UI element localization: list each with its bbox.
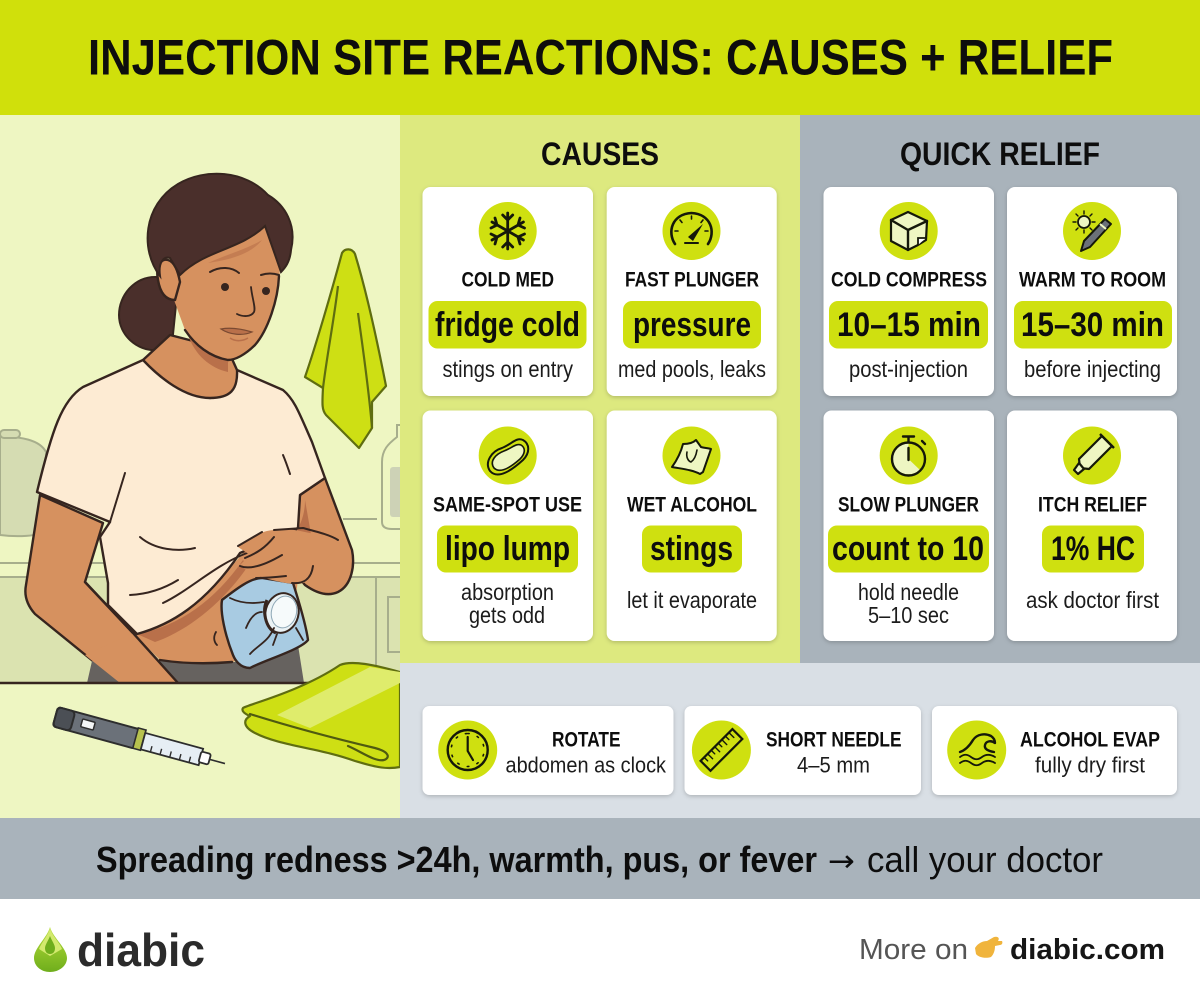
- tip title: SHORT NEEDLE: [766, 729, 902, 752]
- card: fast plunger: [607, 187, 777, 396]
- kitchen background: [0, 425, 408, 683]
- face: [172, 226, 280, 360]
- note: hold needle: [858, 579, 959, 605]
- tip title: ROTATE: [552, 729, 620, 752]
- heading: FAST PLUNGER: [625, 268, 759, 292]
- t-shirt: [37, 360, 325, 634]
- hand: [238, 528, 340, 584]
- ear: [157, 260, 180, 300]
- value pill: lipo lump: [445, 530, 570, 568]
- domain text: diabic.com: [1010, 934, 1165, 966]
- icon: sun and pen: [1063, 202, 1121, 260]
- card: same-spot use: [422, 410, 593, 641]
- folded towel: [242, 663, 400, 768]
- tip text: 4–5 mm: [797, 753, 870, 778]
- panel: illustration of woman using cold compress: [0, 115, 408, 818]
- hair: [148, 174, 293, 276]
- value pill: fridge cold: [435, 306, 580, 344]
- icon: wipe: [662, 426, 720, 484]
- heading: SAME-SPOT USE: [433, 494, 582, 516]
- counter top: [0, 683, 400, 818]
- hanging towel: [305, 249, 386, 448]
- belly: [133, 550, 300, 663]
- note: [858, 579, 959, 628]
- heading: COLD COMPRESS: [831, 268, 987, 292]
- card: warm to room: [1007, 187, 1177, 396]
- value pill: [1042, 526, 1144, 572]
- left arm: [25, 495, 178, 683]
- logo: diabic: [34, 924, 205, 976]
- icon: green droplet: [34, 927, 67, 972]
- card: itch relief: [1007, 410, 1177, 641]
- note: med pools, leaks: [618, 356, 766, 382]
- note: gets odd: [469, 602, 545, 628]
- value pill: [642, 526, 742, 572]
- card: slow plunger: [824, 410, 994, 641]
- tip text: abdomen as clock: [506, 753, 667, 778]
- causes heading: CAUSES: [541, 136, 659, 172]
- icon: ice cube: [880, 202, 938, 260]
- icon: lipo lump: [479, 426, 537, 484]
- heading: SLOW PLUNGER: [838, 494, 979, 516]
- tip card: short needle: [684, 706, 921, 795]
- more on text: More on: [859, 934, 968, 966]
- note: absorption: [461, 579, 554, 605]
- heading: WARM TO ROOM: [1019, 268, 1166, 292]
- note: ask doctor first: [1026, 587, 1160, 613]
- warning bar: [0, 818, 1200, 899]
- note: 5–10 sec: [868, 602, 949, 628]
- left arm front edge: [85, 633, 178, 683]
- arrow: →: [828, 844, 855, 879]
- link: more on diabic.com: [859, 934, 1165, 966]
- ice pack: [222, 578, 308, 668]
- value pill: count to 10: [832, 530, 984, 568]
- value pill: 15–30 min: [1021, 306, 1164, 344]
- icon: ruler: [692, 720, 751, 780]
- insulin pen: [53, 706, 228, 773]
- value pill: [437, 526, 578, 572]
- heading: COLD MED: [462, 268, 554, 292]
- icon: clock: [438, 720, 497, 780]
- note: [461, 579, 554, 628]
- value pill: 10–15 min: [837, 306, 981, 344]
- icon: pointing hand: [975, 937, 1002, 958]
- heading: WET ALCOHOL: [627, 494, 757, 516]
- hair bun: [119, 277, 178, 350]
- value pill: [623, 301, 761, 348]
- woman: [25, 174, 353, 683]
- icon: wave: [947, 720, 1006, 780]
- call to action text: call your doctor: [867, 839, 1103, 880]
- value pill: [428, 301, 586, 348]
- icon: snowflake: [479, 202, 537, 260]
- title banner: [0, 0, 1200, 115]
- note: post-injection: [849, 356, 968, 382]
- icon: gauge: [662, 202, 720, 260]
- note: stings on entry: [442, 356, 573, 382]
- warning text: Spreading redness >24h, warmth, pus, or fever: [96, 839, 817, 880]
- tip card: rotate: [422, 706, 674, 795]
- shirt folds: [110, 455, 290, 603]
- value pill: pressure: [633, 306, 751, 344]
- panel: causes: [400, 115, 800, 663]
- wordmark: diabic: [77, 924, 205, 976]
- neck: [143, 335, 237, 398]
- note: let it evaporate: [627, 587, 757, 613]
- icon: ointment tube: [1063, 426, 1121, 484]
- icon: stopwatch: [880, 426, 938, 484]
- tip title: ALCOHOL EVAP: [1020, 729, 1160, 752]
- tip text: fully dry first: [1035, 753, 1145, 778]
- value pill: stings: [650, 530, 733, 568]
- quick relief heading: QUICK RELIEF: [900, 136, 1100, 172]
- card: cold med: [422, 187, 593, 396]
- tip card: alcohol evap: [932, 706, 1177, 795]
- brows, eyes, nose, mouth: [210, 268, 279, 275]
- panel: prevention tips strip: [400, 663, 1200, 818]
- pants: [87, 645, 304, 683]
- card: cold compress: [824, 187, 994, 396]
- panel: quick relief: [800, 115, 1200, 663]
- card: wet alcohol: [607, 410, 777, 641]
- heading: ITCH RELIEF: [1038, 494, 1147, 516]
- value pill: 1% HC: [1051, 530, 1135, 568]
- note: before injecting: [1024, 356, 1161, 382]
- right arm: [280, 478, 353, 594]
